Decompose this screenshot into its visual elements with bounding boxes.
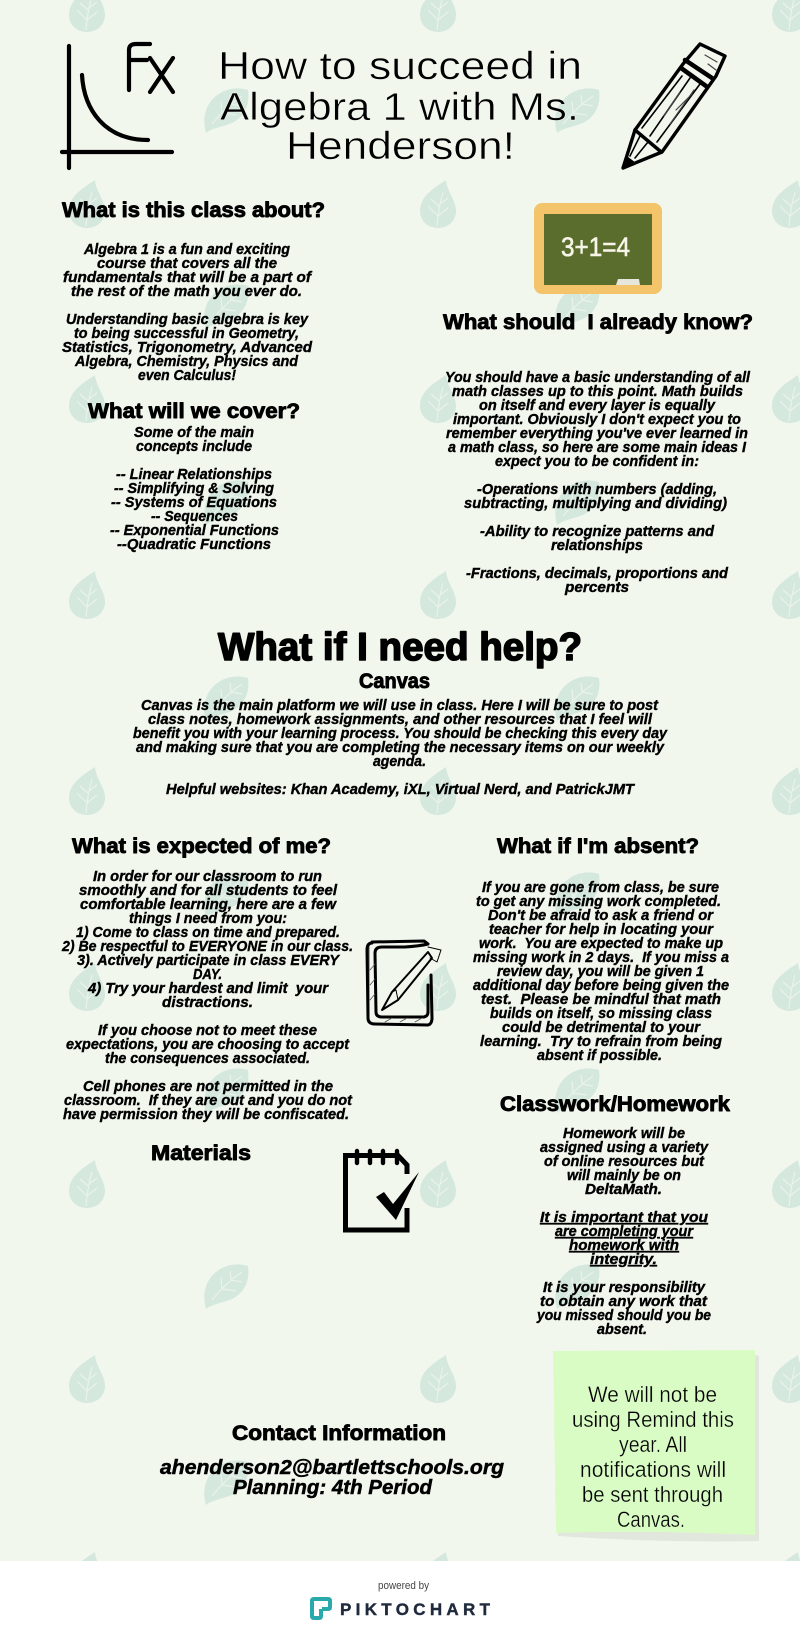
text block: Canvas is the main platform we will use in class. Here I will be sure to post xyxy=(141,698,659,714)
text block: will mainly be on xyxy=(567,1168,681,1184)
text block: Helpful websites: Khan Academy, iXL, Virtual Nerd, and PatrickJMT xyxy=(166,782,635,798)
text block: Some of the main xyxy=(134,425,254,441)
text block: DAY. xyxy=(193,967,222,983)
text block: If you choose not to meet these xyxy=(98,1023,317,1039)
text block: to get any missing work completed. xyxy=(476,894,721,910)
panel: contact information xyxy=(160,1422,504,1499)
footer xyxy=(0,1561,800,1641)
text block: test. Please be mindful that math xyxy=(481,992,721,1008)
text block: teacher for help in locating your xyxy=(489,922,714,938)
text block: expect you to be confident in: xyxy=(495,454,699,470)
heading: What is this class about? xyxy=(62,199,325,222)
logo mark xyxy=(312,1599,330,1618)
text block: expectations, you are choosing to accept xyxy=(66,1037,350,1053)
text block xyxy=(160,1457,504,1499)
text block: remember everything you've ever learned in xyxy=(446,426,748,442)
text block: -- Sequences xyxy=(151,509,238,525)
title: Algebra 1 with Ms. xyxy=(220,86,579,129)
text block: --Quadratic Functions xyxy=(117,537,271,553)
text block: a math class, so here are some main ideas I xyxy=(448,440,747,456)
text block: -- Simplifying & Solving xyxy=(114,481,274,497)
text block: homework with xyxy=(569,1238,679,1254)
text block: DeltaMath. xyxy=(585,1182,662,1198)
heading: What if I'm absent? xyxy=(497,835,699,858)
icon: pencil xyxy=(623,44,725,168)
text block: It is important that you xyxy=(540,1210,708,1226)
text block: If you are gone from class, be sure xyxy=(482,880,719,896)
panel: what is this class about xyxy=(62,199,325,384)
heading: What if I need help? xyxy=(218,626,582,669)
text block xyxy=(61,869,353,1123)
title xyxy=(218,45,582,168)
panel: what if I need help xyxy=(133,626,668,798)
icon: pencil on paper xyxy=(367,941,441,1025)
text block: even Calculus! xyxy=(138,368,236,384)
text block: relationships xyxy=(551,538,643,554)
icon: chalkboard: 3+1=4 xyxy=(561,232,630,262)
heading: materials: Materials xyxy=(151,1142,251,1165)
text block: Cell phones are not permitted in the xyxy=(83,1079,333,1095)
text block: course that covers all the xyxy=(97,256,277,272)
text block: of online resources but xyxy=(544,1154,705,1170)
heading: Contact Information xyxy=(232,1422,446,1445)
text block: the rest of the math you ever do. xyxy=(71,284,302,300)
heading: Classwork/Homework xyxy=(500,1093,730,1116)
panel: what should I already know xyxy=(443,311,753,596)
text block: are completing your xyxy=(555,1224,694,1240)
text block: the consequences associated. xyxy=(105,1051,310,1067)
text block: could be detrimental to your xyxy=(502,1020,701,1036)
text block xyxy=(110,425,279,553)
text block: concepts include xyxy=(136,439,252,455)
icon: function graph xyxy=(62,44,173,168)
text block: builds on itself, so missing class xyxy=(490,1006,712,1022)
text block: -- Linear Relationships xyxy=(116,467,272,483)
text block xyxy=(473,880,729,1064)
text block: -Ability to recognize patterns and xyxy=(480,524,715,540)
text block xyxy=(133,698,668,798)
panel: what is expected of me xyxy=(61,835,353,1123)
text block: percents xyxy=(564,580,629,596)
text block: integrity. xyxy=(590,1252,657,1268)
powered by label: powered by xyxy=(378,1580,429,1592)
text block: -Fractions, decimals, proportions and xyxy=(466,566,729,582)
text block: have permission they will be confiscated. xyxy=(63,1107,349,1123)
icon: chalkboard xyxy=(534,203,662,294)
text block: smoothly and for all students to feel xyxy=(79,883,338,899)
text block: notifications will xyxy=(580,1457,726,1482)
text block xyxy=(572,1382,734,1532)
text block: using Remind this xyxy=(572,1407,734,1432)
text block: -- Exponential Functions xyxy=(110,523,279,539)
text block xyxy=(445,370,751,596)
text block: We will not be xyxy=(588,1382,717,1407)
text block: and making sure that you are completing the necessary items on our weekly xyxy=(136,740,665,756)
text block: absent. xyxy=(597,1322,647,1338)
text block: comfortable learning, here are a few xyxy=(80,897,338,913)
text block: missing work in 2 days. If you miss a xyxy=(473,950,729,966)
title: How to succeed in xyxy=(218,45,582,88)
text block: math classes up to this point. Math builds xyxy=(452,384,743,400)
text block: to being successful in Geometry, xyxy=(74,326,299,342)
text block xyxy=(62,242,313,384)
text block: 3). Actively participate in class EVERY xyxy=(77,953,340,969)
text block: Algebra, Chemistry, Physics and xyxy=(74,354,299,370)
text block: you missed should you be xyxy=(536,1308,711,1324)
text block: learning. Try to refrain from being xyxy=(480,1034,722,1050)
text block: You should have a basic understanding of all xyxy=(445,370,751,386)
text block: on itself and every layer is equally xyxy=(479,398,716,414)
text block: absent if possible. xyxy=(537,1048,662,1064)
heading: What will we cover? xyxy=(88,400,300,423)
title: Henderson! xyxy=(286,125,515,168)
text block: Canvas. xyxy=(617,1507,685,1532)
panel: what will we cover xyxy=(88,400,300,553)
text block: classroom. If they are out and you do not xyxy=(64,1093,353,1109)
text block: Algebra 1 is a fun and exciting xyxy=(83,242,290,258)
text block: Planning: 4th Period xyxy=(233,1477,433,1499)
text block: important. Obviously I don't expect you to xyxy=(453,412,741,428)
text block: agenda. xyxy=(373,754,426,770)
text block: distractions. xyxy=(162,995,253,1011)
text block: -Operations with numbers (adding, xyxy=(477,482,717,498)
text block: things I need from you: xyxy=(129,911,287,927)
text block: fundamentals that will be a part of xyxy=(63,270,313,286)
icon: checklist notepad xyxy=(343,1151,419,1230)
text block: subtracting, multiplying and dividing) xyxy=(464,496,727,512)
text block: class notes, homework assignments, and other resources that I feel will xyxy=(148,712,653,728)
text block: review day, you will be given 1 xyxy=(497,964,704,980)
text block: Statistics, Trigonometry, Advanced xyxy=(62,340,313,356)
text block: be sent through xyxy=(582,1482,723,1507)
panel: classwork and homework xyxy=(500,1093,730,1338)
text block: -- Systems of Equations xyxy=(111,495,277,511)
logo wordmark: PIKTOCHART xyxy=(340,1600,491,1619)
panel: sticky note xyxy=(553,1350,759,1541)
text block: It is your responsibility xyxy=(543,1280,706,1296)
text block: year. All xyxy=(619,1432,687,1457)
text block: Homework will be xyxy=(563,1126,685,1142)
subheading: Canvas: Canvas xyxy=(359,670,430,693)
text block: In order for our classroom to run xyxy=(93,869,322,885)
text block: 1) Come to class on time and prepared. xyxy=(76,925,340,941)
heading: What should I already know? xyxy=(443,311,753,334)
text block: 2) Be respectful to EVERYONE in our class. xyxy=(61,939,353,955)
text block: Understanding basic algebra is key xyxy=(66,312,309,328)
text block: work. You are expected to make up xyxy=(479,936,723,952)
text block: benefit you with your learning process. You should be checking this every day xyxy=(133,726,668,742)
text block: ahenderson2@bartlettschools.org xyxy=(160,1457,504,1479)
text block xyxy=(536,1126,711,1338)
text block: 4) Try your hardest and limit your xyxy=(87,981,329,997)
text block: additional day before being given the xyxy=(473,978,729,994)
text block: to obtain any work that xyxy=(540,1294,708,1310)
text block: Don't be afraid to ask a friend or xyxy=(488,908,714,924)
heading: What is expected of me? xyxy=(72,835,331,858)
text block: assigned using a variety xyxy=(540,1140,709,1156)
panel: what if I'm absent xyxy=(473,835,729,1064)
